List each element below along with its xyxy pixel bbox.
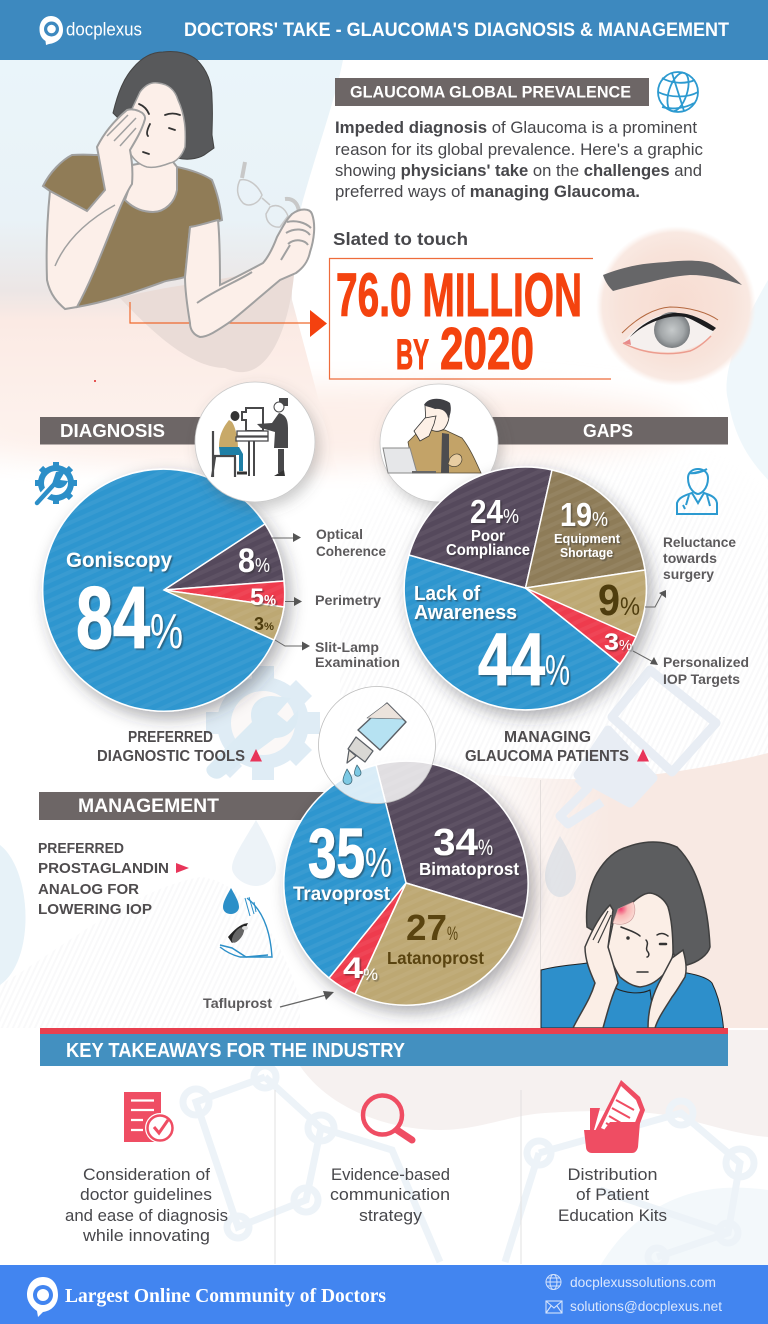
takeaway text [330, 1166, 450, 1225]
takeaway text: Evidence-based [331, 1166, 450, 1184]
facial features [621, 927, 668, 972]
red sore spot [613, 902, 635, 924]
slice: personalized IOP targets 3% [526, 588, 636, 664]
takeaway text: Education Kits [558, 1207, 667, 1225]
icon: magnifying glass [363, 1096, 412, 1140]
background watermark icons [183, 666, 754, 1266]
footer logo [27, 1277, 58, 1317]
section heading: management [39, 792, 329, 820]
pie labels: Awareness [414, 602, 517, 624]
section heading: management: MANAGEMENT [78, 796, 219, 817]
skin patch [596, 226, 756, 386]
pie labels: % [478, 835, 493, 860]
callout: reluctance towards surgery: Reluctance [663, 535, 736, 550]
stray red dot [94, 380, 96, 382]
callout: tafluprost: Tafluprost [203, 996, 273, 1011]
pie labels: % [255, 555, 270, 577]
pie chart: managing glaucoma patients [404, 467, 646, 710]
section heading: diagnosis: DIAGNOSIS [60, 420, 165, 441]
stat: by 2020 [396, 316, 534, 382]
section heading: gaps [490, 417, 728, 444]
exam figures [212, 398, 288, 477]
pie labels: % [264, 592, 276, 609]
circle: eye exam illustration [195, 382, 315, 502]
chart caption: managing glaucoma patients [465, 729, 649, 765]
face [122, 83, 185, 167]
pie labels: 19 [560, 496, 592, 533]
icon: doctor [677, 469, 717, 514]
watermark drop left [232, 820, 276, 886]
callout: optical coherence: Coherence [316, 544, 386, 559]
pie labels: Lack of [414, 583, 480, 605]
illustration: cataract eye [596, 226, 756, 386]
left hand [573, 905, 618, 1028]
footer website: docplexussolutions.com [570, 1275, 716, 1290]
chart caption: preferred diagnostic tools: DIAGNOSTIC TOOLS [97, 748, 245, 765]
pie labels: % [264, 621, 274, 633]
pie labels: 3 [254, 614, 264, 634]
chest and neck [125, 158, 177, 212]
circle: eye drop bottle [318, 686, 436, 804]
pie labels: % [150, 605, 183, 659]
orange connector arrow [130, 302, 327, 337]
pie labels: 84 [76, 568, 150, 667]
slice: bimatoprost 34% [376, 761, 528, 918]
glasses [238, 162, 299, 227]
eyebrow [603, 261, 742, 291]
callout: reluctance towards surgery: surgery [663, 567, 714, 582]
hair [587, 842, 710, 965]
callout: slit-lamp examination: Slit-Lamp [315, 640, 379, 655]
callout: optical coherence: Optical [316, 527, 363, 542]
callout: personalized IOP targets [633, 651, 749, 687]
illustration: woman rubbing eye holding glasses [43, 51, 327, 372]
big stat frame [330, 258, 611, 382]
takeaway 1 [65, 1092, 228, 1245]
pie labels: 5 [250, 584, 264, 611]
pie labels: 3 [604, 629, 619, 656]
logo mark [40, 16, 63, 45]
shirt [43, 155, 222, 307]
pie labels: % [545, 647, 570, 695]
takeaway text: of Patient [576, 1186, 649, 1204]
callout: optical coherence [272, 527, 386, 559]
pie labels: % [619, 637, 632, 654]
pie labels: Goniscopy [66, 549, 172, 572]
docplexus logo: docplexus [66, 18, 142, 40]
background blob [120, 262, 295, 372]
pie labels: Equipment [554, 531, 621, 546]
slice: travoprost 35% [284, 765, 406, 978]
callout: reluctance towards surgery [645, 535, 736, 607]
footer email: solutions@docplexus.net [570, 1299, 722, 1314]
slice: lack of awareness 44% [404, 555, 620, 710]
takeaway text: doctor guidelines [80, 1186, 212, 1204]
hair [113, 51, 214, 159]
text: preferred prostaglandin analog [38, 840, 189, 918]
callout: personalized IOP targets: Personalized [663, 655, 749, 670]
slice: equipment shortage 19% [526, 470, 645, 588]
slice: goniscopy 84% [43, 469, 274, 711]
pie labels: 34 [433, 822, 478, 864]
watermark molecule network [183, 1066, 754, 1266]
footer tagline: Largest Online Community of Doctors [65, 1285, 386, 1307]
pie labels: % [592, 509, 608, 531]
pie labels: % [363, 965, 378, 984]
pie labels: 27 [406, 907, 447, 948]
lower arm and hand with glasses [185, 210, 314, 337]
text: preferred prostaglandin analog: LOWERING IOP [38, 901, 152, 918]
bottle [343, 703, 406, 784]
takeaway text [558, 1166, 667, 1225]
stat: by 2020: 2020 [440, 316, 534, 382]
callouts: gaps labels [633, 535, 749, 687]
pie labels: Latanoprost [387, 948, 484, 968]
pie labels: 24 [470, 493, 504, 530]
right hand [648, 950, 686, 1028]
callout: perimetry: Perimetry [315, 593, 382, 608]
section heading: glaucoma global prevalence: GLAUCOMA GLOBAL PREVALENCE [350, 82, 631, 102]
pie labels: 35 [308, 814, 365, 892]
eye white [623, 313, 714, 352]
slice: reluctance towards surgery 9% [526, 570, 646, 637]
section heading: glaucoma global prevalence [335, 78, 649, 106]
pie labels: 44 [478, 618, 545, 701]
icon: eye with drop [220, 888, 272, 957]
slice: perimetry 5% [164, 581, 285, 607]
pie labels [66, 542, 276, 667]
section heading: key takeaways: KEY TAKEAWAYS FOR THE INDUSTRY [66, 1040, 406, 1062]
red accent line [40, 1028, 728, 1034]
pie labels: 4 [343, 952, 363, 985]
pie labels: Poor [471, 528, 505, 545]
intro paragraph: Impeded diagnosis of Glaucoma is a prominent [335, 119, 697, 137]
pie labels: Bimatoprost [419, 859, 519, 879]
pie chart: preferred prostaglandin analog [284, 761, 528, 1005]
pie labels: Shortage [560, 545, 613, 560]
pie labels: Travoprost [293, 884, 391, 905]
doctor figure [383, 399, 481, 474]
lower lid [623, 336, 711, 354]
pie chart: preferred diagnostic tools [43, 469, 285, 711]
stat: by 2020: BY [396, 331, 429, 379]
slated to touch label: Slated to touch [333, 229, 468, 249]
header title: DOCTORS' TAKE - GLAUCOMA'S DIAGNOSIS & MANAGEMENT [184, 19, 729, 41]
chart caption: preferred diagnostic tools: PREFERRED [128, 729, 213, 746]
takeaway text [65, 1166, 228, 1245]
icon: gear and wrench [35, 462, 77, 504]
slice: optical coherence 8% [164, 524, 284, 590]
illustration: woman with eye pain [541, 842, 724, 1028]
iris [654, 312, 690, 348]
takeaway text: Consideration of [83, 1166, 210, 1184]
face [608, 893, 673, 987]
watermark drop right [545, 836, 576, 897]
pie labels: Compliance [446, 542, 530, 559]
callouts: diagnostic tool labels [272, 527, 400, 670]
header bar [0, 0, 768, 60]
section heading: diagnosis [40, 417, 210, 444]
slice: slit-lamp 3% [164, 590, 284, 640]
vertical dividers [275, 780, 540, 1264]
intro paragraph: preferred ways of managing Glaucoma. [335, 183, 640, 201]
icon: checklist document [124, 1092, 175, 1143]
pie labels: % [620, 593, 640, 621]
pie labels: % [503, 506, 519, 528]
text: preferred prostaglandin analog: ANALOG FOR [38, 881, 139, 898]
chart caption: managing glaucoma patients: MANAGING [504, 729, 591, 746]
stat: 76.0 million: 76.0 MILLION [336, 261, 582, 329]
collar [600, 988, 655, 1028]
footer bar [0, 1265, 768, 1324]
watermark gear [206, 666, 320, 780]
circle: stressed doctor illustration [380, 384, 498, 502]
pie labels: % [365, 839, 392, 886]
callout: reluctance towards surgery: towards [663, 551, 717, 566]
pie labels: 9 [598, 576, 620, 625]
chart caption: preferred diagnostic tools [97, 729, 262, 765]
chart caption: managing glaucoma patients: GLAUCOMA PATIENTS [465, 748, 629, 765]
pie labels: 8 [238, 542, 255, 580]
pie labels [293, 814, 519, 985]
text: preferred prostaglandin analog: PREFERRED [38, 840, 124, 857]
docplexus logo [40, 16, 142, 45]
takeaway text: communication [330, 1186, 450, 1204]
text: preferred prostaglandin analog: PROSTAGLANDIN [38, 860, 169, 877]
watermark bottle [560, 670, 716, 824]
slice: latanoprost 27% [355, 883, 523, 1005]
intro paragraph [335, 119, 703, 201]
takeaway 2 [330, 1096, 450, 1225]
takeaway text: strategy [359, 1207, 423, 1225]
pie labels [414, 493, 640, 701]
icon: globe [658, 70, 698, 114]
section heading: key takeaways [40, 1034, 728, 1066]
takeaway text: while innovating [82, 1227, 210, 1245]
eyeliner [630, 313, 716, 337]
slice: poor compliance 24% [409, 467, 552, 588]
section heading: gaps: GAPS [583, 420, 633, 441]
callout: tafluprost [203, 991, 334, 1011]
callout: slit-lamp examination [275, 640, 400, 670]
callout: slit-lamp examination: Examination [315, 655, 400, 670]
icon: folder with documents [584, 1080, 645, 1153]
takeaway text: and ease of diagnosis [65, 1207, 228, 1225]
raised arm and hand [47, 109, 145, 309]
callout: perimetry [285, 593, 382, 608]
takeaway text: Distribution [568, 1166, 658, 1184]
takeaway 3 [558, 1080, 667, 1225]
shirt [541, 963, 724, 1028]
callout: personalized IOP targets: IOP Targets [663, 672, 740, 687]
facial features [139, 104, 180, 154]
intro paragraph: showing physicians' take on the challenges and [335, 162, 702, 180]
eyelid crease [622, 307, 718, 333]
intro paragraph: reason for its global prevalence. Here's a graphic [335, 141, 703, 159]
slice: tafluprost 4% [329, 883, 406, 994]
pie labels: % [447, 924, 458, 945]
